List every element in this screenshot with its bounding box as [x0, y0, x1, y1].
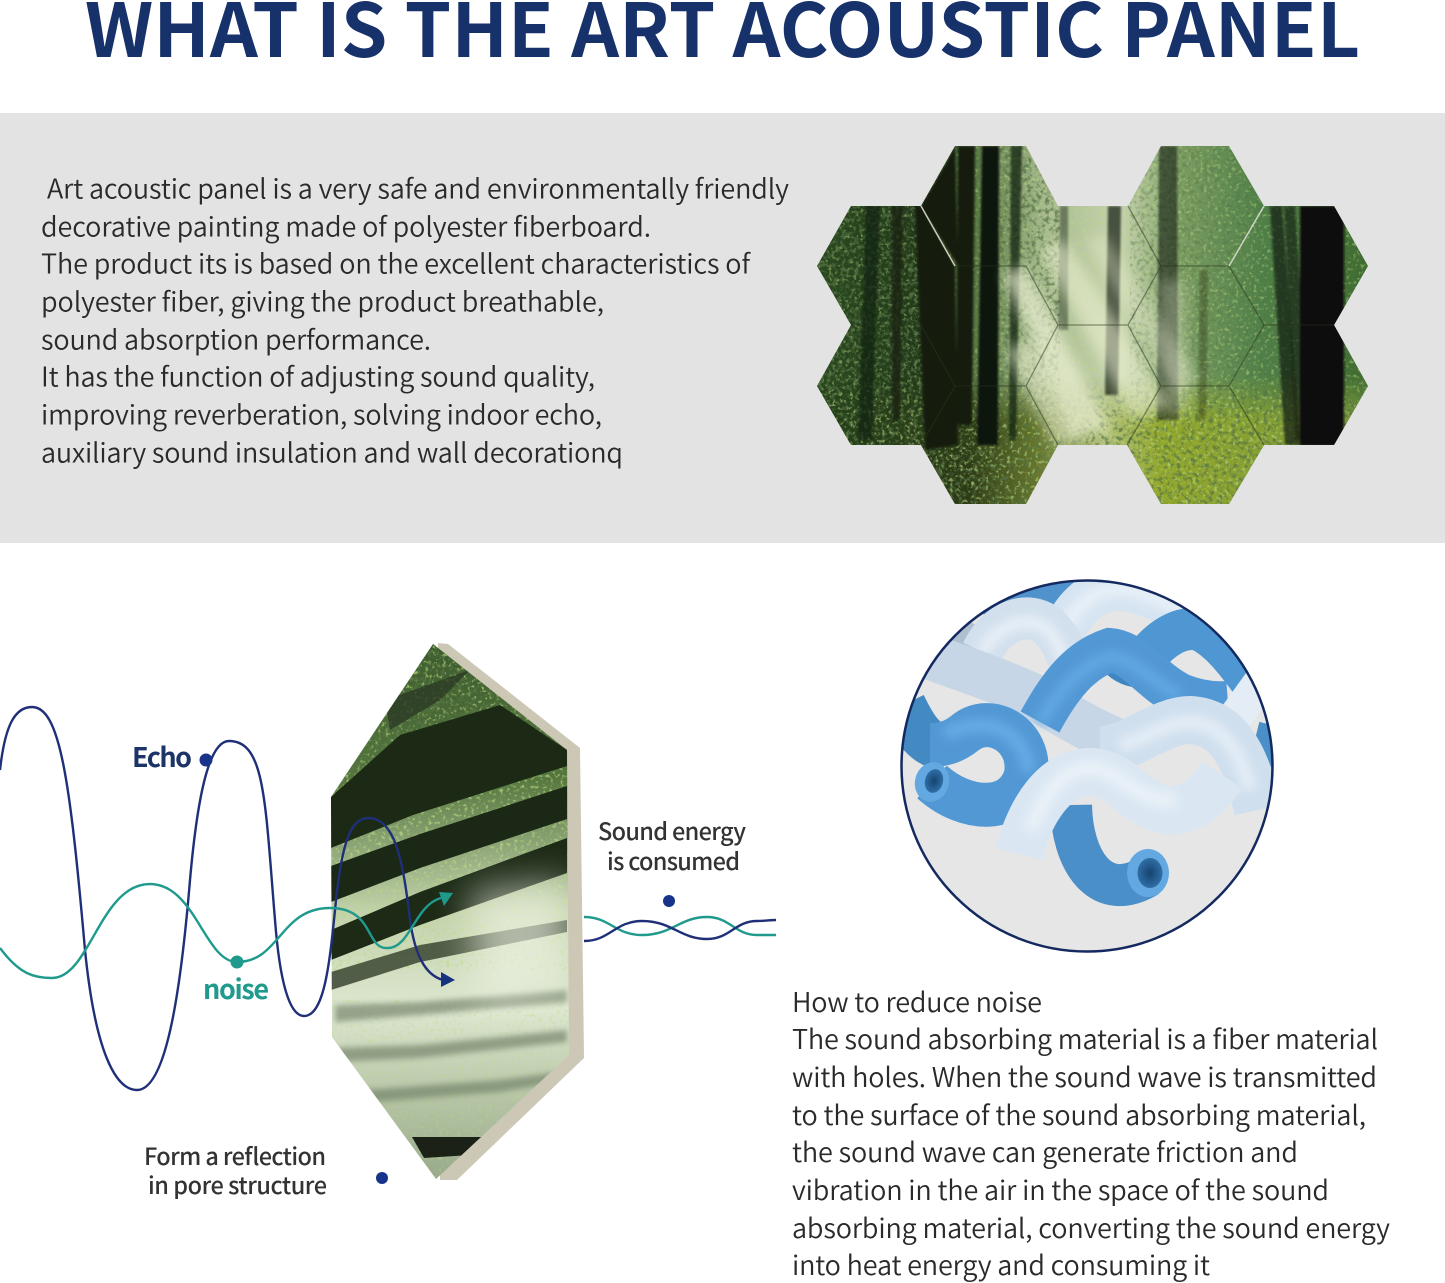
label: Echo: Echo	[132, 736, 192, 775]
label: sound energy is consumed: is consumed	[607, 843, 740, 877]
reduced waves	[584, 917, 776, 941]
intro paragraph: improving reverberation, solving indoor echo,	[41, 394, 602, 432]
dot: sound energy marker	[663, 895, 675, 907]
label: form a reflection in pore structure: Form a reflection	[144, 1138, 326, 1172]
arrowhead: noise	[439, 892, 453, 906]
how to reduce noise paragraph: with holes. When the sound wave is transmitted	[792, 1056, 1377, 1095]
intro paragraph: polyester fiber, giving the product breathable,	[41, 280, 604, 320]
panel: sound wave diagram	[0, 640, 776, 1201]
intro paragraph	[41, 168, 789, 470]
band background	[0, 113, 1445, 543]
intro paragraph: It has the function of adjusting sound quality,	[41, 356, 595, 394]
how to reduce noise paragraph: into heat energy and consuming it	[792, 1244, 1210, 1283]
how to reduce noise paragraph: absorbing material, converting the sound energy	[792, 1207, 1390, 1246]
how to reduce noise paragraph	[792, 981, 1390, 1283]
fiber tubes	[903, 580, 1272, 885]
hexagon seams	[851, 206, 1334, 445]
arrowhead: echo	[441, 972, 455, 987]
how to reduce noise paragraph: the sound wave can generate friction and	[792, 1131, 1298, 1170]
illustration: magnified fiber structure	[902, 580, 1272, 952]
dot: noise marker	[230, 956, 244, 968]
label: sound energy is consumed	[598, 813, 746, 877]
acoustic panel face	[325, 640, 575, 1185]
dot: reflection marker	[376, 1172, 388, 1184]
intro paragraph: auxiliary sound insulation and wall decorationq	[41, 432, 623, 470]
image: hexagon forest wall panels	[810, 140, 1375, 510]
circle outline	[902, 580, 1272, 952]
how to reduce noise paragraph: How to reduce noise	[792, 981, 1042, 1020]
intro paragraph: Art acoustic panel is a very safe and environmentally friendly	[47, 168, 789, 206]
tube opening: left	[910, 758, 954, 806]
how to reduce noise paragraph: The sound absorbing material is a fiber material	[792, 1018, 1378, 1057]
intro paragraph: decorative painting made of polyester fiberboard.	[41, 206, 651, 244]
label: noise: noise	[203, 968, 269, 1007]
intro paragraph: The product its is based on the excellent characteristics of	[41, 242, 751, 282]
label: form a reflection in pore structure: in pore structure	[148, 1167, 327, 1201]
label: form a reflection in pore structure	[144, 1138, 327, 1201]
intro paragraph: sound absorption performance.	[41, 318, 431, 358]
dot: echo marker	[200, 754, 212, 766]
how to reduce noise paragraph: vibration in the air in the space of the sound	[792, 1169, 1329, 1208]
circle background	[902, 581, 1272, 951]
noise wave	[0, 884, 441, 978]
echo wave	[0, 707, 443, 1090]
how to reduce noise paragraph: to the surface of the sound absorbing material,	[792, 1094, 1366, 1133]
tube opening: lower right	[1127, 849, 1169, 897]
acoustic panel edge	[438, 643, 584, 1180]
label: sound energy is consumed: Sound energy	[598, 813, 746, 847]
panel: intro band	[0, 113, 1445, 543]
